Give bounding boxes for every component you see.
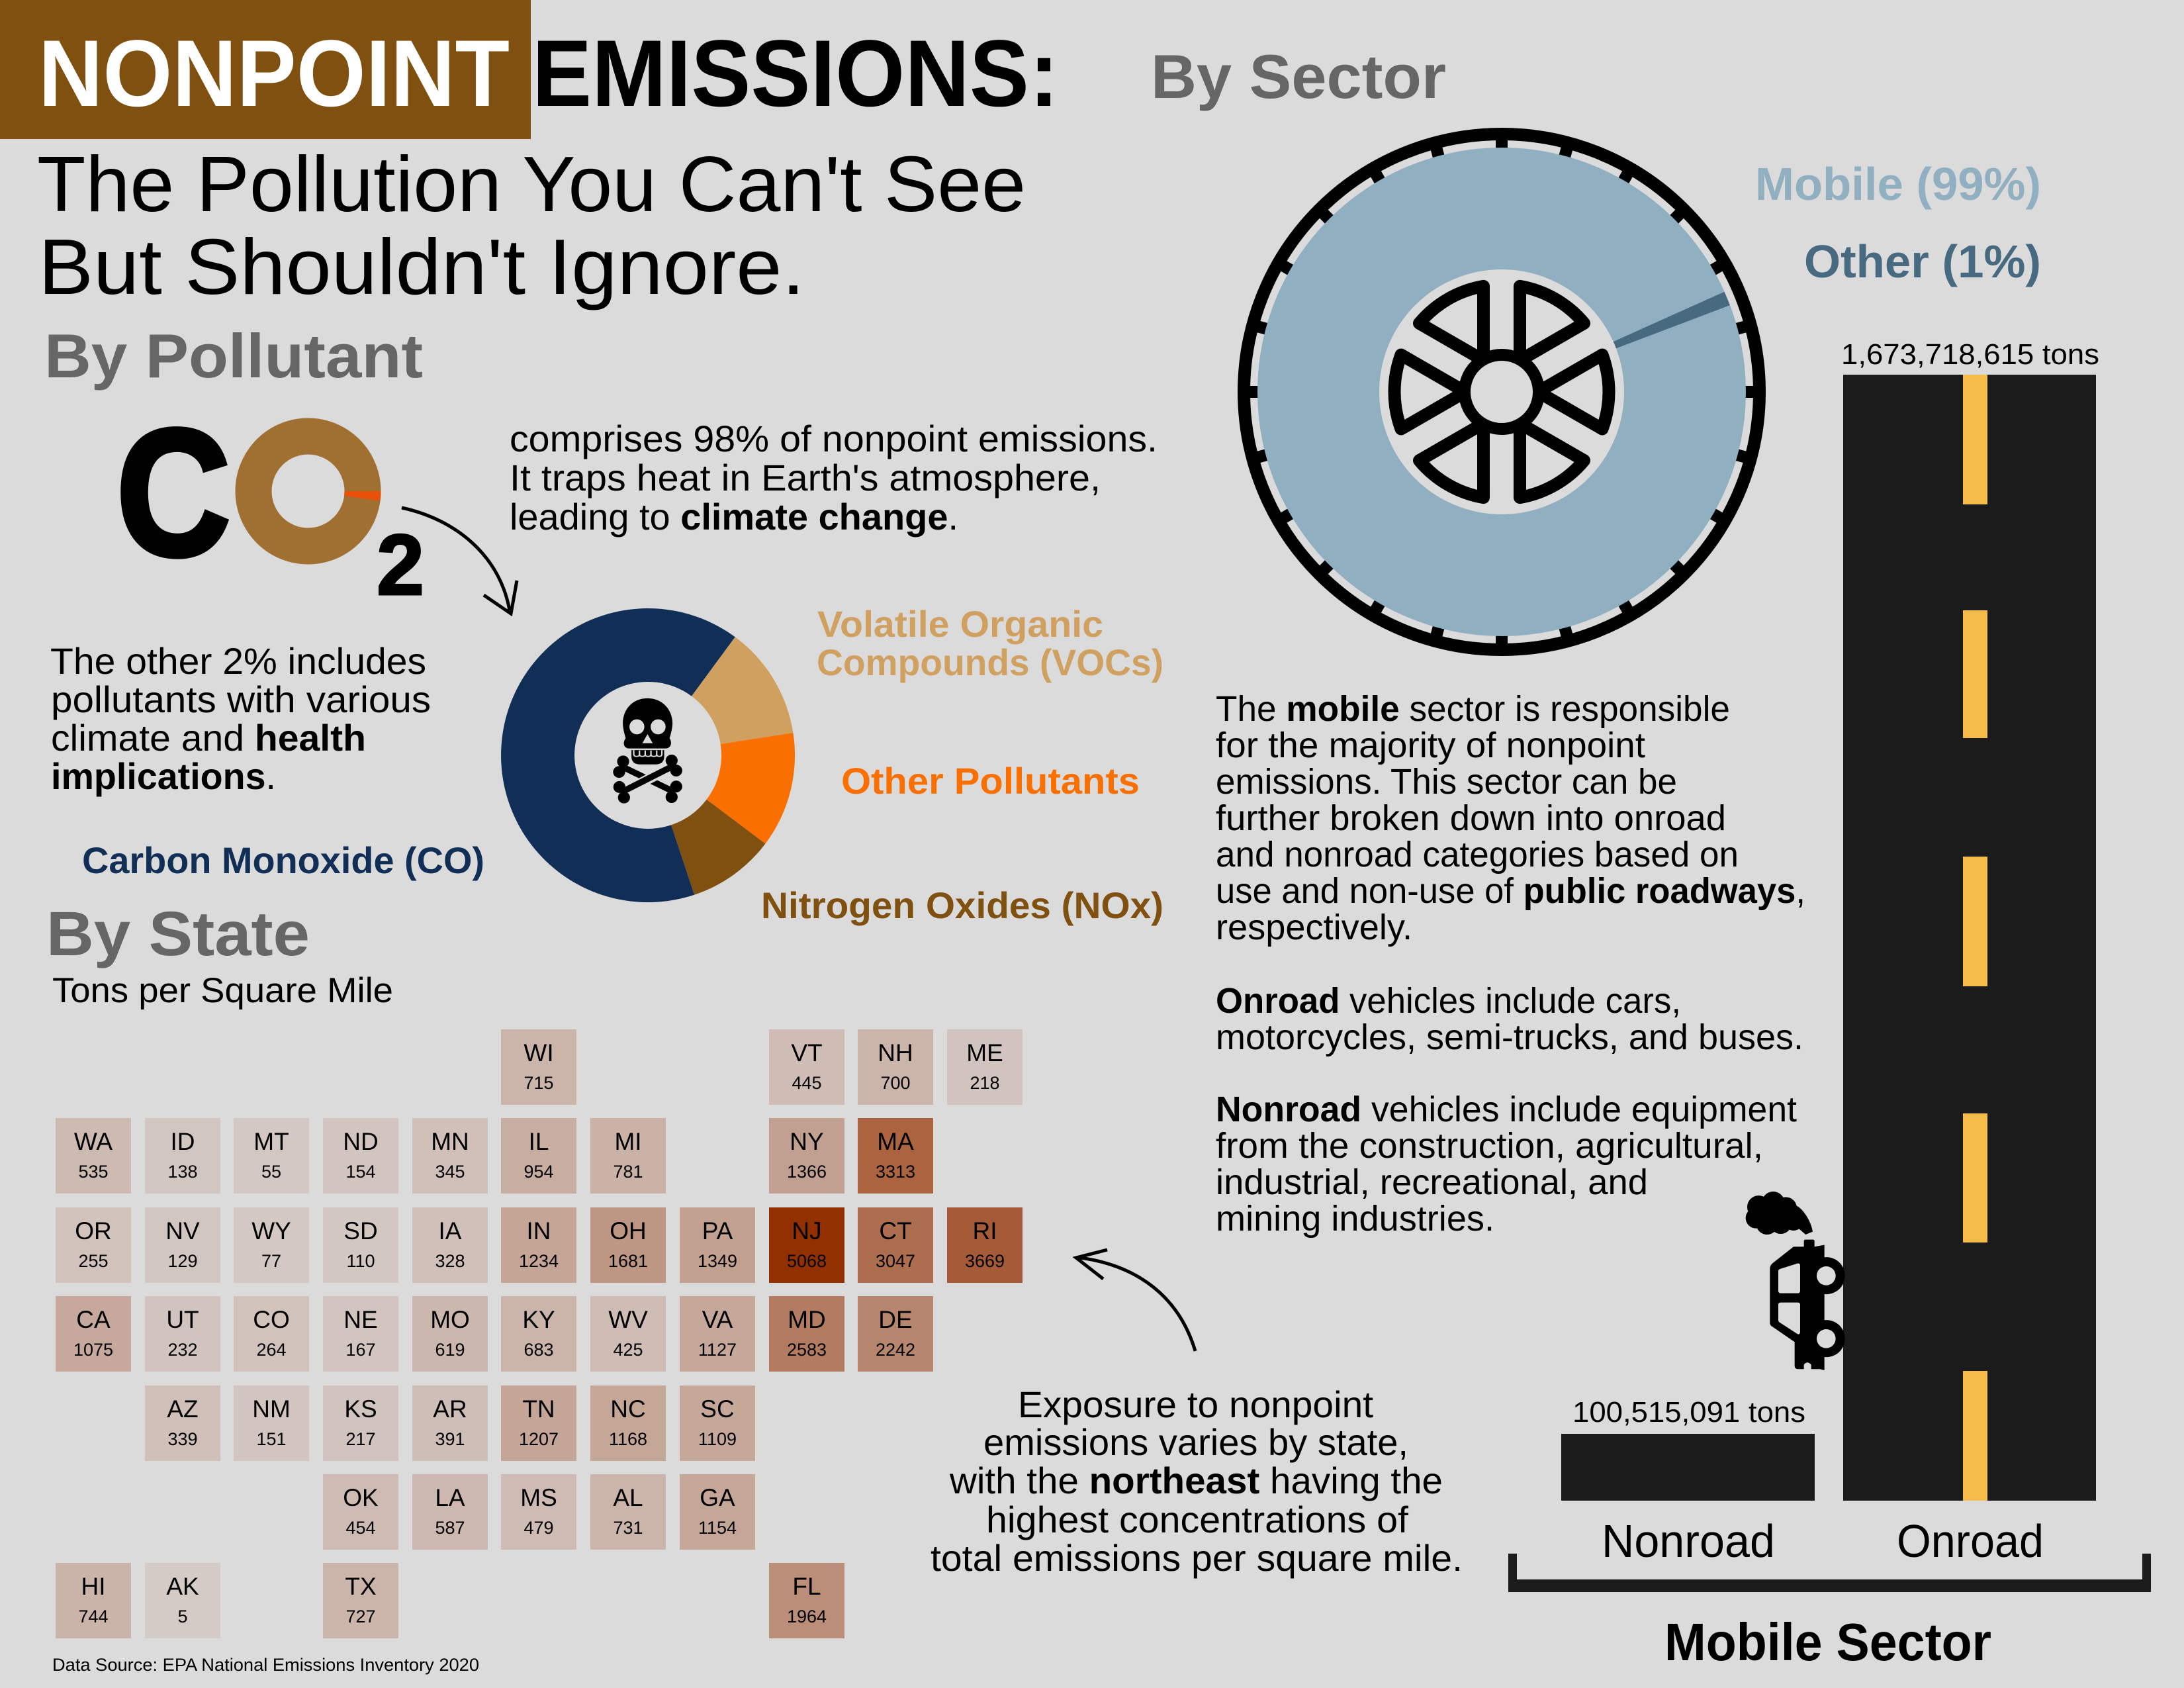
tile: AZ (145, 1385, 220, 1461)
tile: WV: WV (608, 1306, 648, 1333)
tile: IA: IA (439, 1217, 462, 1244)
tile: MN: MN (431, 1128, 469, 1155)
text: nonroad description: mining industries. (1216, 1199, 1494, 1239)
tile: MS: 479 (523, 1518, 554, 1538)
label: VOCs (817, 603, 1163, 683)
tile: MT (234, 1118, 309, 1194)
CO2 symbol with donut O: C (116, 392, 230, 593)
axis label: Onroad: Onroad (1897, 1515, 2044, 1567)
tile: NV: 129 (167, 1251, 198, 1271)
tile: NC: NC (610, 1395, 646, 1423)
tile: MT: 55 (261, 1162, 281, 1182)
tile: AK: AK (166, 1573, 199, 1600)
tile: NC (590, 1385, 666, 1461)
data source note: Data Source: EPA National Emissions Inventory 2020 (52, 1655, 479, 1675)
tile: WA (56, 1118, 131, 1194)
wheel pie chart: sector share (1242, 132, 1761, 651)
tile: WY: 77 (261, 1251, 281, 1271)
tile: NH: NH (878, 1039, 913, 1066)
tile: OR: 255 (78, 1251, 109, 1271)
tile: IA (412, 1207, 488, 1283)
tile: NJ: 5068 (787, 1251, 827, 1271)
tile: NE (323, 1296, 398, 1372)
label: Mobile 99 percent: Mobile (99%) (1755, 158, 2041, 210)
text: other 2 percent: implications. (51, 755, 276, 797)
tile: DE: 2242 (876, 1340, 915, 1360)
tile: MN: 345 (435, 1162, 465, 1182)
axis title: Mobile Sector: Mobile Sector (1664, 1613, 1991, 1671)
tile: NJ (769, 1207, 844, 1283)
tile: GA: 1154 (698, 1518, 737, 1538)
title banner: NONPOINT (0, 0, 531, 139)
tile: SD: 110 (346, 1251, 375, 1271)
text: other 2 percent: The other 2% includes (50, 640, 426, 682)
tile: MI: 781 (613, 1162, 643, 1182)
tile map: emissions by state (56, 1029, 1023, 1638)
tile: GA: GA (700, 1484, 735, 1511)
tile: TN: 1207 (519, 1429, 559, 1449)
tile: AK (145, 1563, 220, 1638)
tile: MI: MI (614, 1128, 642, 1155)
tile: NH: 700 (880, 1073, 911, 1093)
tile: VA: 1127 (698, 1340, 737, 1360)
tile: AL: AL (613, 1484, 643, 1511)
tile: IL: 954 (523, 1162, 554, 1182)
tile: MO: 619 (435, 1340, 465, 1360)
tile: LA (412, 1474, 488, 1550)
tile: MN (412, 1118, 488, 1194)
tile: TN: TN (522, 1395, 555, 1423)
bar: nonroad (1561, 1434, 1815, 1501)
tile: PA: PA (702, 1217, 733, 1244)
heading: By Sector: By Sector (1151, 42, 1446, 111)
subtitle: The Pollution You Can't See (37, 140, 1026, 228)
tile: AR: AR (433, 1395, 467, 1423)
tile: ME (947, 1029, 1023, 1105)
tile: TX: 727 (345, 1607, 376, 1626)
arrow: CO2 to pollutants donut (402, 508, 517, 614)
tile: PA: 1349 (698, 1251, 737, 1271)
label: VOCs: Compounds (VOCs) (817, 641, 1163, 683)
tile: AK: 5 (177, 1607, 188, 1626)
tile: IL (501, 1118, 576, 1194)
tile: WI: 715 (523, 1073, 554, 1093)
text: nonroad description: from the construction, agricultural, (1216, 1126, 1763, 1166)
tile: TX: TX (345, 1573, 377, 1600)
value: nonroad tons: 100,515,091 tons (1572, 1396, 1805, 1429)
text: mobile sector description: use and non-use of public roadways, (1216, 871, 1805, 911)
tile: KY: KY (522, 1306, 555, 1333)
tile: MA (858, 1118, 933, 1194)
tile: FL: 1964 (787, 1607, 827, 1626)
text: other 2 percent: climate and health (51, 717, 366, 759)
text: exposure by state: highest concentrations of (986, 1499, 1408, 1540)
tile: NV: NV (165, 1217, 200, 1244)
tile: NY (769, 1118, 844, 1194)
tile: SD: SD (343, 1217, 378, 1244)
text: nonroad description: Nonroad vehicles include equipment (1216, 1090, 1797, 1129)
tile: SC: 1109 (698, 1429, 737, 1449)
text: onroad description (1216, 981, 1803, 1057)
text: nonroad description (1216, 1090, 1797, 1239)
tile: MA: MA (877, 1128, 914, 1155)
tile: NM: 151 (256, 1429, 287, 1449)
tile: RI: RI (973, 1217, 997, 1244)
tile: CA: 1075 (73, 1340, 113, 1360)
CO2 symbol with donut O: 2 (377, 516, 424, 613)
tile: MD (769, 1296, 844, 1372)
tile: VA (680, 1296, 755, 1372)
text: mobile sector description: further broken down into onroad (1216, 798, 1726, 838)
tile: LA: 587 (435, 1518, 465, 1538)
tile: OK (323, 1474, 398, 1550)
tile: CT (858, 1207, 933, 1283)
label: Other Pollutants: Other Pollutants (841, 760, 1140, 802)
tile: NE: NE (343, 1306, 378, 1333)
tile: CT: 3047 (876, 1251, 915, 1271)
tile: TN (501, 1385, 576, 1461)
donut chart: other pollutants (501, 608, 795, 902)
tile: MS: MS (520, 1484, 557, 1511)
tile: WA: 535 (78, 1162, 109, 1182)
tile: DE: DE (878, 1306, 913, 1333)
tile: AZ: 339 (167, 1429, 198, 1449)
tile: KS: KS (344, 1395, 377, 1423)
heading: By State: By State (46, 899, 310, 969)
tile: WV (590, 1296, 666, 1372)
tile: KS (323, 1385, 398, 1461)
tile: AR (412, 1385, 488, 1461)
text: mobile sector description: and nonroad categories based on (1216, 835, 1739, 874)
icon: car with exhaust (1746, 1192, 1845, 1370)
tile: IN: IN (527, 1217, 551, 1244)
subtitle (37, 140, 1026, 311)
tile: NH (858, 1029, 933, 1105)
tile: IN: 1234 (519, 1251, 559, 1271)
tile: IA: 328 (435, 1251, 465, 1271)
tile: GA (680, 1474, 755, 1550)
tile: RI (947, 1207, 1023, 1283)
tile: CO: CO (253, 1306, 290, 1333)
tile: OH (590, 1207, 666, 1283)
tile: MD: MD (788, 1306, 826, 1333)
text: CO2 description: leading to climate change. (510, 496, 958, 538)
tile: OH: OH (610, 1217, 647, 1244)
value: onroad tons: 1,673,718,615 tons (1841, 338, 2099, 371)
tile: OH: 1681 (608, 1251, 648, 1271)
text: CO2 description (510, 418, 1158, 538)
tile: DE (858, 1296, 933, 1372)
tile: KS: 217 (345, 1429, 376, 1449)
CO2 symbol with donut O (116, 392, 424, 613)
text: nonroad description: industrial, recreational, and (1216, 1162, 1648, 1202)
tile: MT: MT (253, 1128, 289, 1155)
tile: VT: VT (791, 1039, 823, 1066)
tile: ID: ID (171, 1128, 195, 1155)
tile: PA (680, 1207, 755, 1283)
tile: NE: 167 (345, 1340, 376, 1360)
tile: SD (323, 1207, 398, 1283)
tile: SC: SC (700, 1395, 735, 1423)
tile: UT: UT (166, 1306, 199, 1333)
subheading: Tons per Square Mile: Tons per Square Mile (52, 971, 393, 1010)
text: CO2 description: comprises 98% of nonpoint emissions. (510, 418, 1158, 459)
tile: WY (234, 1207, 309, 1283)
label: Nitrogen Oxides: Nitrogen Oxides (NOx) (761, 884, 1163, 926)
tile: FL: FL (792, 1573, 821, 1600)
tile: NJ: NJ (792, 1217, 822, 1244)
tile: WY: WY (251, 1217, 291, 1244)
text: exposure by state: total emissions per square mile. (931, 1537, 1463, 1579)
text: mobile sector description: The mobile sector is responsible (1216, 689, 1730, 729)
tile: WV: 425 (613, 1340, 643, 1360)
tile: MO: MO (430, 1306, 470, 1333)
tile: NY: 1366 (787, 1162, 827, 1182)
tile: AR: 391 (435, 1429, 465, 1449)
tile: FL (769, 1563, 844, 1638)
arrow: state text to map (1076, 1250, 1195, 1351)
tile: MI (590, 1118, 666, 1194)
tile: IN (501, 1207, 576, 1283)
tile: RI: 3669 (965, 1251, 1005, 1271)
tile: VA: VA (702, 1306, 733, 1333)
icon: wheel hub spokes (1394, 281, 1609, 503)
tile: NM: NM (252, 1395, 291, 1423)
tile: NY: NY (790, 1128, 824, 1155)
tile: CO: 264 (256, 1340, 287, 1360)
tile: ND: 154 (345, 1162, 376, 1182)
tile: NV (145, 1207, 220, 1283)
tile: MD: 2583 (787, 1340, 827, 1360)
tile: SC (680, 1385, 755, 1461)
text: exposure by state (931, 1383, 1463, 1579)
tile: CO (234, 1296, 309, 1372)
text: other 2 percent (50, 640, 431, 797)
text: onroad description: Onroad vehicles include cars, (1216, 981, 1681, 1021)
tile: AL: 731 (613, 1518, 643, 1538)
text: CO2 description: It traps heat in Earth's atmosphere, (510, 457, 1101, 498)
tile: ID: 138 (167, 1162, 198, 1182)
tile: WI (501, 1029, 576, 1105)
bracket under bars (1508, 1554, 2151, 1592)
tile: AZ: AZ (167, 1395, 199, 1423)
tile: MO (412, 1296, 488, 1372)
tile: WA: WA (74, 1128, 113, 1155)
tile: KY (501, 1296, 576, 1372)
text: mobile sector description: respectively. (1216, 908, 1412, 947)
text: exposure by state: with the northeast having the (949, 1460, 1443, 1501)
tile: LA: LA (435, 1484, 465, 1511)
axis label: Nonroad: Nonroad (1602, 1515, 1775, 1567)
text: other 2 percent: pollutants with various (51, 679, 431, 720)
tile: ME: ME (966, 1039, 1003, 1066)
tile: KY: 683 (523, 1340, 554, 1360)
tile: OR (56, 1207, 131, 1283)
tile: MS (501, 1474, 576, 1550)
tile: HI (56, 1563, 131, 1638)
text: exposure by state: emissions varies by state, (983, 1421, 1408, 1463)
tile: OK: OK (343, 1484, 379, 1511)
icon: skull and crossbones (613, 698, 682, 804)
label: Other 1 percent: Other (1%) (1804, 236, 2041, 287)
label: VOCs: Volatile Organic (817, 603, 1103, 645)
tile: UT (145, 1296, 220, 1372)
bar: onroad as road (1843, 375, 2096, 1501)
tile: ND (323, 1118, 398, 1194)
tile: OK: 454 (345, 1518, 376, 1538)
subtitle: But Shouldn't Ignore. (38, 223, 805, 311)
tile: ME: 218 (970, 1073, 1000, 1093)
tile: CA: CA (76, 1306, 111, 1333)
text: mobile sector description: emissions. This sector can be (1216, 762, 1677, 802)
text: onroad description: motorcycles, semi-trucks, and buses. (1216, 1017, 1803, 1057)
text: exposure by state: Exposure to nonpoint (1018, 1383, 1373, 1425)
label: Carbon Monoxide: Carbon Monoxide (CO) (82, 839, 484, 881)
tile: ND: ND (343, 1128, 379, 1155)
text: mobile sector description: for the majority of nonpoint (1216, 726, 1645, 765)
tile: NC: 1168 (609, 1429, 647, 1449)
title banner: NONPOINT: NONPOINT (38, 21, 510, 126)
tile: VT (769, 1029, 844, 1105)
tile: NM (234, 1385, 309, 1461)
tile: UT: 232 (167, 1340, 198, 1360)
tile: OR: OR (75, 1217, 112, 1244)
tile: ID (145, 1118, 220, 1194)
title: EMISSIONS: EMISSIONS: (532, 21, 1059, 126)
tile: HI: HI (81, 1573, 106, 1600)
tile: AL (590, 1474, 666, 1550)
heading: By Pollutant: By Pollutant (44, 321, 423, 391)
text: mobile sector description (1216, 689, 1805, 947)
tile: HI: 744 (78, 1607, 109, 1626)
tile: CA (56, 1296, 131, 1372)
tile: WI: WI (523, 1039, 554, 1066)
tile: MA: 3313 (876, 1162, 915, 1182)
tile: VT: 445 (792, 1073, 822, 1093)
tile: CT: CT (879, 1217, 912, 1244)
tile: IL: IL (529, 1128, 549, 1155)
tile: TX (323, 1563, 398, 1638)
